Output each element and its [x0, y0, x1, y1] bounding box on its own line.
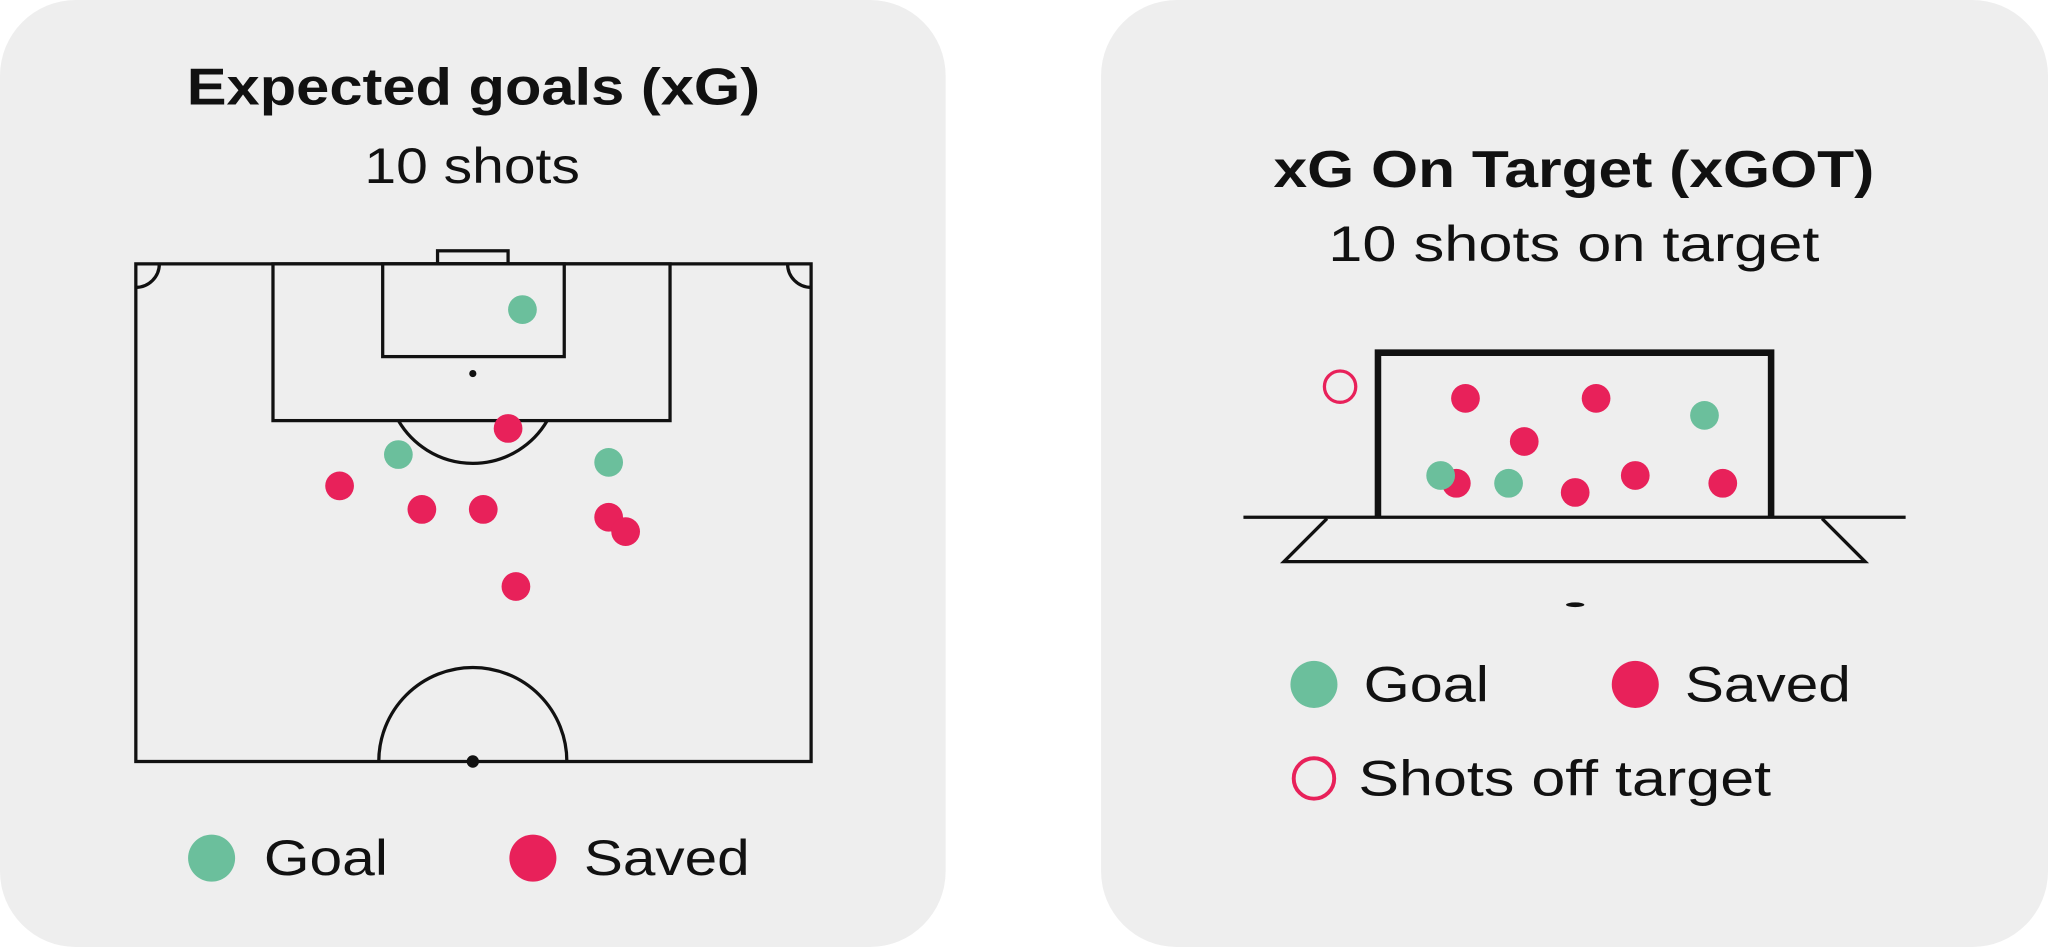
shots: xG dots: [325, 295, 640, 601]
panel: xG on target: [1101, 0, 2048, 947]
legend: xGOT: Saved: [1685, 656, 1851, 712]
legend: xG: [188, 830, 750, 886]
subtitle: 10 shots on target: 10 shots on target: [1328, 216, 1820, 272]
title: xGOT: xG On Target (xGOT): [1273, 141, 1874, 199]
legend: xG: Goal: [264, 830, 388, 886]
legend: xGOT: Shots off target: [1358, 750, 1771, 806]
legend: xG: Saved: [584, 830, 750, 886]
pitch diagram: [136, 251, 811, 766]
title: expected goals: Expected goals (xG): [187, 59, 760, 117]
legend: xGOT: Goal: [1364, 656, 1489, 712]
legend: xGOT: [1290, 656, 1851, 806]
subtitle: 10 shots: 10 shots: [364, 138, 580, 194]
panel: expected goals: [0, 0, 946, 947]
goal frame diagram: [1243, 353, 1906, 607]
shots: on target dots: [1324, 371, 1737, 507]
